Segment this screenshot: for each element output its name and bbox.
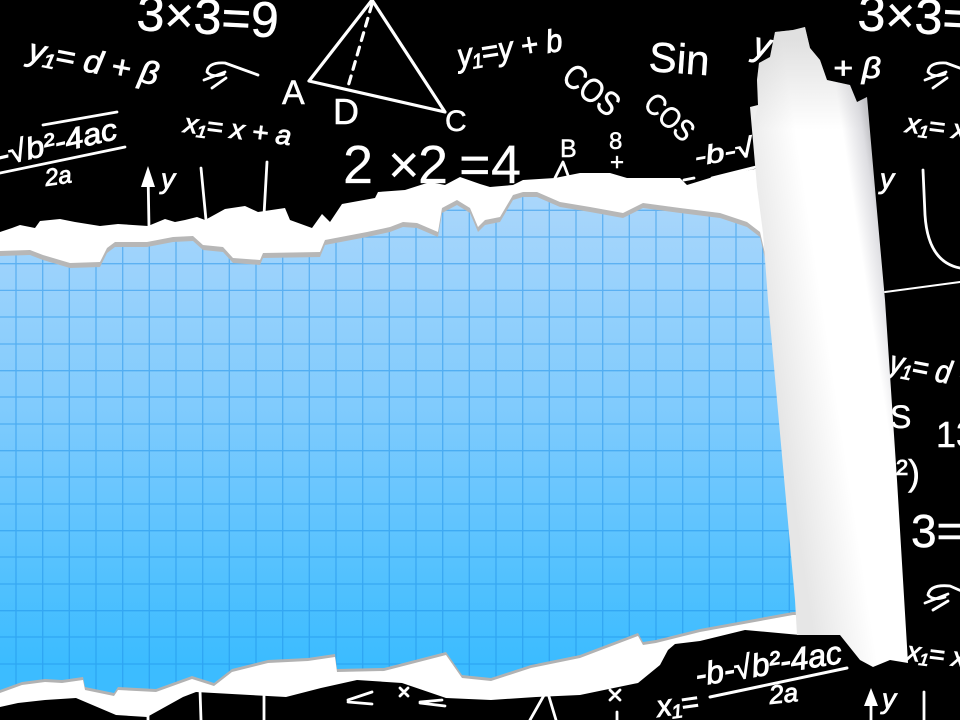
axis arrowhead fragment [555, 162, 569, 178]
label C: C [445, 105, 467, 138]
roll: main curl [750, 27, 908, 667]
icon: squiggle [925, 63, 960, 88]
axis arrow y, bottom: y [880, 683, 898, 714]
quadratic formula fragment, centre [684, 132, 760, 180]
torn edge shadow: top [0, 192, 800, 688]
paper roll [750, 27, 908, 667]
axis ticks [201, 162, 267, 220]
quadratic formula, bottom [652, 634, 847, 720]
icon: squiggle [204, 63, 258, 88]
plus sign: + [610, 149, 624, 176]
chalkboard math: bottom [148, 634, 924, 720]
quadratic formula, bottom: 2a [766, 677, 799, 710]
blue graph paper [0, 190, 800, 700]
word: cos: COS [555, 56, 627, 124]
roll: shaded top section [752, 27, 870, 130]
grid lines [0, 190, 800, 700]
chalkboard math: left and centre [0, 0, 760, 228]
curve graph [923, 170, 960, 268]
quadratic formula fragment, centre: -b-√ [692, 132, 757, 172]
word: sin: Sin [647, 33, 711, 84]
letter y: y [878, 163, 896, 194]
fragment: +b: + β [833, 52, 881, 85]
fragment: y1 behind roll: y₁ [749, 25, 785, 68]
label B: B [560, 135, 577, 163]
equation: y1=d+b: y₁= d + β [24, 31, 162, 92]
equation: 2x2=4: 2×2=4 [343, 135, 521, 195]
fragments: cut off marks [148, 688, 620, 720]
equation: y1=y+b: y₁=y + b [453, 22, 565, 74]
icon: squiggle [925, 586, 960, 610]
fragment: squared bracket: ²) [896, 452, 920, 493]
label D: D [333, 91, 359, 132]
triangle diagram [282, 0, 467, 138]
label A: A [282, 74, 305, 112]
equation: x1=x+a: x₁= x + a [180, 108, 293, 151]
quadratic formula fragment, left [0, 112, 125, 192]
torn white paper [0, 168, 800, 717]
quadratic formula, bottom: -b-√b²-4ac [692, 634, 844, 693]
axis arrow y: y [159, 163, 177, 194]
chalkboard math: right column [749, 0, 960, 673]
word: cos: COS [637, 87, 701, 149]
axis arrow y [141, 163, 177, 228]
fragment: S: S [890, 399, 911, 435]
axis line [885, 282, 960, 292]
quadratic formula fragment, left: 2a [42, 161, 73, 192]
axis tick, bottom [923, 692, 925, 720]
torn edge shadow: bottom [0, 200, 800, 696]
fragment: 8 +: 8 [609, 128, 622, 155]
axis arrow y, bottom [864, 683, 898, 720]
